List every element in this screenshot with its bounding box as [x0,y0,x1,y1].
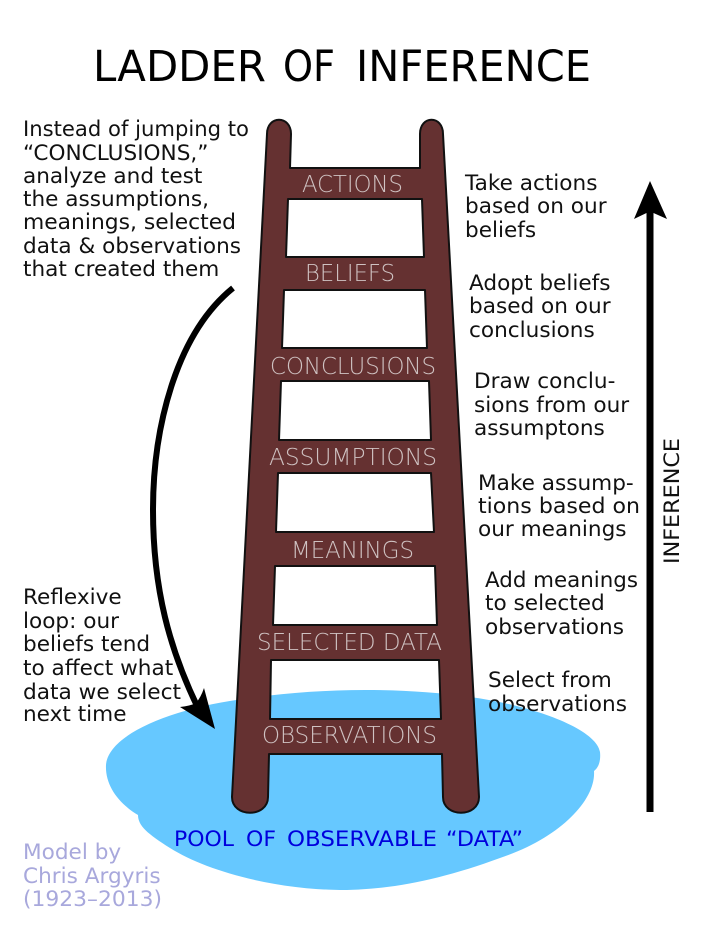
left note: reflexive loop [23,585,181,727]
left note: jumping to conclusions: meanings, selected [23,210,236,235]
step: meanings: to selected [485,591,605,616]
left note: reflexive loop: beliefs tend [23,632,150,657]
attribution: (1923–2013) [23,887,162,912]
left note: reflexive loop: Reflexive [23,585,122,610]
inference label: INFERENCE [660,438,685,564]
left note: jumping to conclusions: Instead of jumping to [23,117,249,142]
ladder [232,120,479,813]
pool label: OBSERVABLE [287,827,437,852]
step: conclusions: Draw conclu- [474,369,615,394]
rung label: observations: OBSERVATIONS [262,723,437,749]
rung label: beliefs: BELIEFS [305,261,395,287]
rung label: selected data: SELECTED DATA [257,630,442,656]
title: INFERENCE [356,42,591,92]
step: beliefs: Adopt beliefs [469,271,610,296]
step: assumptions: Make assump- [478,471,634,496]
left note: reflexive loop: next time [23,702,126,727]
step: beliefs [469,271,611,343]
rung label: assumptions: ASSUMPTIONS [269,445,437,471]
inference arrow [634,181,667,812]
rung label: actions: ACTIONS [302,172,403,198]
left note: jumping to conclusions [23,117,249,282]
step: actions [464,171,607,243]
left note: jumping to conclusions: analyze and test [23,164,202,189]
left note: reflexive loop: to affect what [23,656,173,681]
pool label [174,827,523,852]
step: conclusions [474,369,629,441]
step: meanings [485,568,638,640]
step: selected data: Select from [488,668,612,693]
step: assumptions [478,471,640,542]
left note: reflexive loop: data we select [23,680,181,705]
step: actions: Take actions [464,171,597,196]
pool of observable data [106,690,600,890]
left note: jumping to conclusions: the assumptions, [23,187,209,212]
step: actions: beliefs [465,218,536,243]
step: meanings: observations [485,615,624,640]
attribution [23,840,162,912]
step: selected data: observations [488,692,627,717]
step: meanings: Add meanings [485,568,638,593]
attribution: Chris Argyris [23,864,161,889]
left note: reflexive loop: loop: our [23,609,119,634]
reflexive loop arrow [153,288,233,729]
step: selected data [488,668,627,717]
pool label: “DATA” [446,827,523,852]
left note: jumping to conclusions: that created them [23,257,219,282]
step: conclusions: assumptons [474,416,605,441]
step: conclusions: sions from our [474,393,629,418]
step: beliefs: conclusions [469,318,595,343]
title: LADDER [93,42,266,92]
attribution: Model by [23,840,121,865]
left note: jumping to conclusions: “CONCLUSIONS,” [23,141,208,166]
title: OF [283,42,335,92]
title [93,42,591,92]
pool label: OF [246,827,276,852]
step: assumptions: our meanings [478,517,627,542]
pool label: POOL [174,827,234,852]
rung label: meanings: MEANINGS [291,538,414,564]
step: beliefs: based on our [469,294,611,319]
rung label: conclusions: CONCLUSIONS [270,354,436,380]
step: assumptions: tions based on [478,494,640,519]
left note: jumping to conclusions: data & observations [23,234,241,259]
step: actions: based on our [465,194,607,219]
